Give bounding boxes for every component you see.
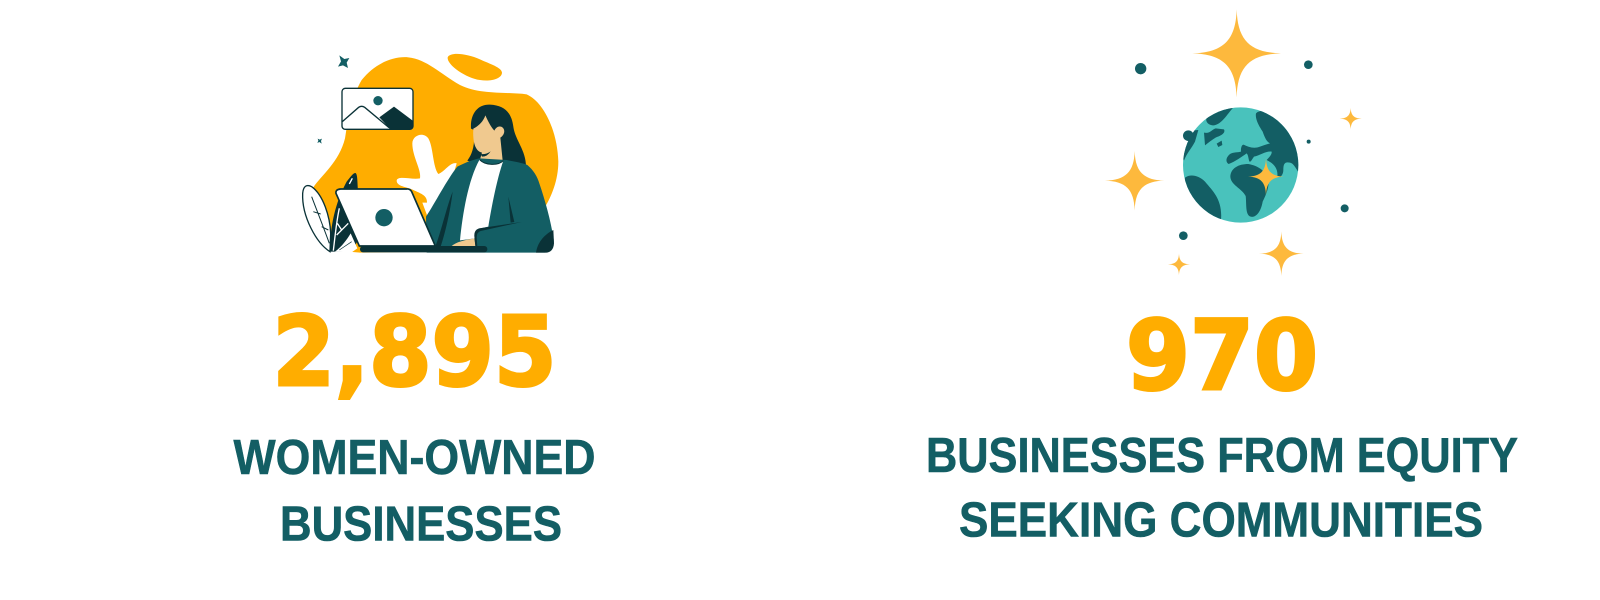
plant [303, 173, 360, 252]
woman [426, 105, 554, 253]
label: women-owned businesses: BUSINESSES [280, 498, 562, 552]
number: 2,895: 2,895 [272, 296, 556, 408]
sleeve shade [536, 230, 554, 253]
sparkle over the globe [1248, 158, 1284, 195]
picture card [342, 88, 413, 129]
icon: sparkle small [317, 139, 322, 144]
left fold [435, 192, 453, 247]
illustration: woman working on a laptop [303, 54, 558, 253]
illustration: globe with sparkles [1105, 9, 1362, 276]
orange blob background [313, 57, 558, 253]
hair [467, 105, 526, 170]
icon: globe [1180, 107, 1303, 223]
icon: sparkle large [338, 55, 349, 68]
label: women-owned businesses: WOMEN-OWNED [234, 431, 596, 485]
face and neck [473, 115, 504, 161]
number: 970: 970 [1126, 300, 1318, 412]
white shirt [460, 160, 503, 240]
laptop [336, 189, 487, 252]
orange blob top [448, 54, 502, 81]
island on the globe edge [1183, 130, 1194, 141]
label: businesses from equity seeking communities [926, 429, 1518, 548]
dots [1135, 60, 1349, 240]
label: businesses from equity seeking communities: SEEKING COMMUNITIES [959, 494, 1483, 548]
arm fold [474, 197, 522, 247]
label: businesses from equity seeking communities: BUSINESSES FROM EQUITY [926, 429, 1518, 483]
hand [452, 238, 476, 247]
cardigan [426, 158, 554, 253]
white splash [397, 135, 457, 216]
sparkles [1105, 9, 1362, 276]
label: women-owned businesses [234, 431, 596, 552]
